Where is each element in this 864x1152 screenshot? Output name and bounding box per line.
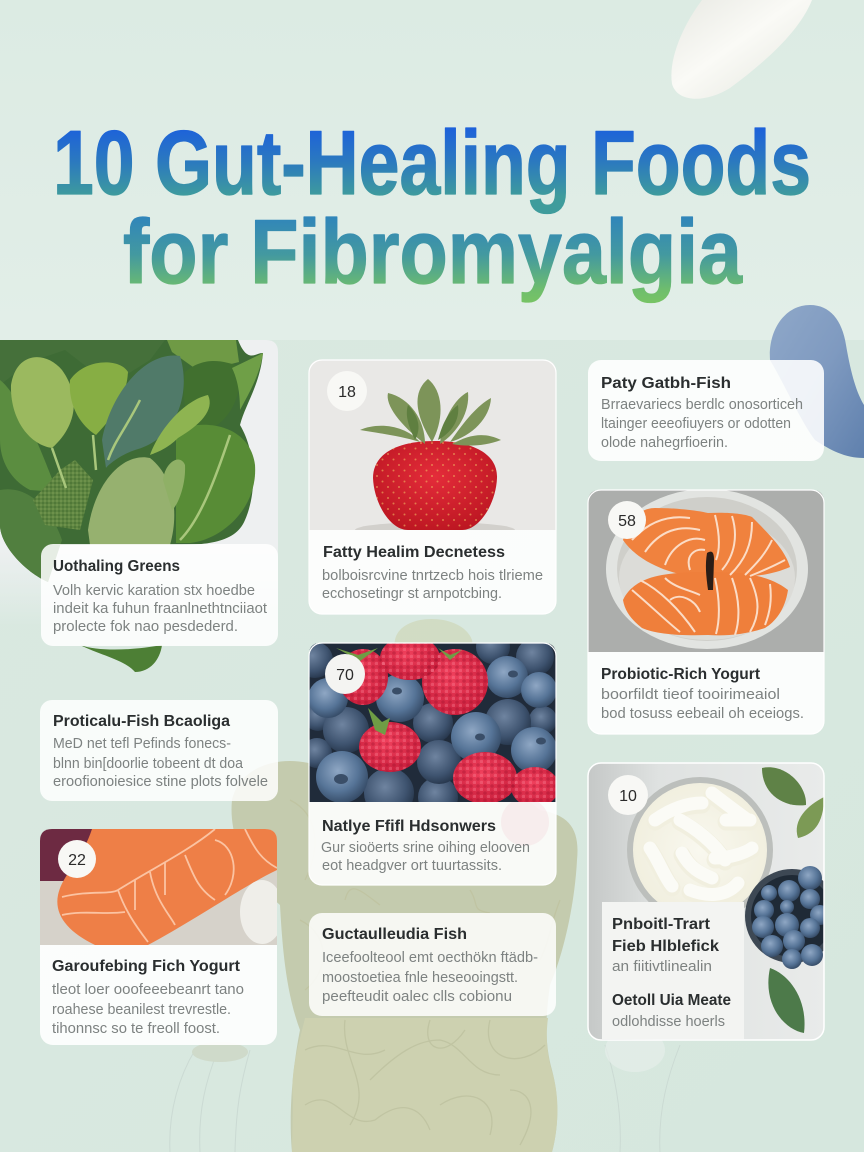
card text: strawberry: Fatty Healim Decnetess <box>323 544 505 561</box>
panel: right text card <box>588 360 824 461</box>
badge: number: 18 <box>338 384 356 401</box>
card text: overlay panel: an fiitivtlinealin <box>612 959 712 975</box>
badge: number: 58 <box>618 513 636 530</box>
card text: salmon <box>52 958 244 1037</box>
card text: berries <box>321 818 530 874</box>
card text: overlay panel <box>602 902 744 1039</box>
badge: number: 70 <box>336 667 354 684</box>
card text: yogurt: boorfildt tieof tooirimeaiol <box>601 687 780 703</box>
badge: number <box>58 840 96 878</box>
panel: centre text card: Iceefoolteool emt oecthökn ftädb- <box>322 950 538 966</box>
card text: yogurt: Probiotic-Rich Yogurt <box>601 666 761 683</box>
card text: strawberry: bolboisrcvine tnrtzecb hois tlrieme <box>322 568 543 584</box>
panel: centre text card: Guctaulleudia Fish <box>322 926 467 943</box>
card text: salmon: Garoufebing Fich Yogurt <box>52 958 241 975</box>
card text: berries: Gur sioöerts srine oihing elooven <box>321 840 530 856</box>
card text: overlay panel: Fieb Hlblefick <box>612 938 719 955</box>
decorative blue cloth <box>770 305 864 458</box>
card text: leafy greens: prolecte fok nao pesdederd. <box>53 619 238 635</box>
badge: number: 22 <box>68 852 86 869</box>
badge: number <box>608 501 646 539</box>
panel: mixed berries card <box>297 630 559 885</box>
panel: right text card: Paty Gatbh-Fish <box>601 375 731 392</box>
panel: left text card: Proticalu-Fish Bcaoliga <box>53 713 230 730</box>
image: spinach <box>0 340 278 672</box>
panel: right text card: olode nahegrfioerin. <box>601 435 728 451</box>
panel: yogurt and blueberries card <box>588 763 839 1040</box>
badge: number: 10 <box>619 788 637 805</box>
illustration: gut anatomy <box>170 619 680 1152</box>
card text: berries: eot headgver ort tuurtassits. <box>322 858 502 874</box>
panel: right text card: Brraevariecs berdlc onosorticeh <box>601 397 803 413</box>
card text: overlay panel: Pnboitl-Trart <box>612 916 711 933</box>
panel: left text card <box>40 700 278 801</box>
panel: centre text card: moostoetiea fnle heseooingstt. <box>322 970 518 986</box>
panel: leafy greens <box>0 340 278 672</box>
image: berries <box>309 643 556 802</box>
panel: centre text card: peefteudit oalec clls cobionu <box>322 989 512 1005</box>
card text: overlay panel: Oetoll Uia Meate <box>612 992 731 1009</box>
decorative white stone <box>671 0 812 99</box>
card text: yogurt <box>601 666 804 722</box>
panel: left text card: MeD net tefl Pefinds fonecs- <box>53 736 231 752</box>
title: for Fibromyalgia <box>123 202 743 303</box>
card text: salmon: tleot loer ooofeeebeanrt tano <box>52 982 244 998</box>
panel: strawberry card <box>309 360 556 614</box>
panel: left text card: eroofionoiesice stine plots folvele <box>53 774 268 790</box>
card text: leafy greens: indeit ka fuhun fraanlnethtnciiaot <box>53 601 267 617</box>
image: strawberry <box>309 360 556 538</box>
card outline <box>588 763 824 1040</box>
card text: salmon: roahese beanilest trevrestle. <box>52 1002 231 1018</box>
card text: leafy greens: Uothaling Greens <box>53 558 180 575</box>
badge: number <box>608 775 648 815</box>
card text: yogurt: bod tosuss eebeail oh eceiogs. <box>601 706 804 722</box>
card text: overlay panel: odlohdisse hoerls <box>612 1014 725 1030</box>
card text: strawberry: ecchosetingr st arnpotcbing. <box>322 586 502 602</box>
image: salmon on plate <box>588 489 824 652</box>
badge: number <box>327 371 367 411</box>
panel: salmon plate card <box>588 489 824 734</box>
panel: left text card: blnn bin[doorlie tobeent dt doa <box>53 756 244 772</box>
card text: salmon: tihonnsc so te freoll foost. <box>52 1021 220 1037</box>
card text: berries: Natlye Ffifl Hdsonwers <box>322 818 496 835</box>
panel: right text card: ltainger eeeofiuyers or odotten <box>601 416 791 432</box>
panel: salmon card left <box>40 829 284 1045</box>
card text: leafy greens: Volh kervic karation stx hoedbe <box>53 583 255 599</box>
card text: leafy greens <box>41 544 278 646</box>
card text: strawberry <box>322 544 543 602</box>
title <box>53 113 811 303</box>
badge: number <box>325 654 365 694</box>
image: yogurt bowl and blueberries <box>588 763 839 1040</box>
image: salmon fillet <box>40 829 284 945</box>
panel: centre text card <box>309 913 556 1016</box>
